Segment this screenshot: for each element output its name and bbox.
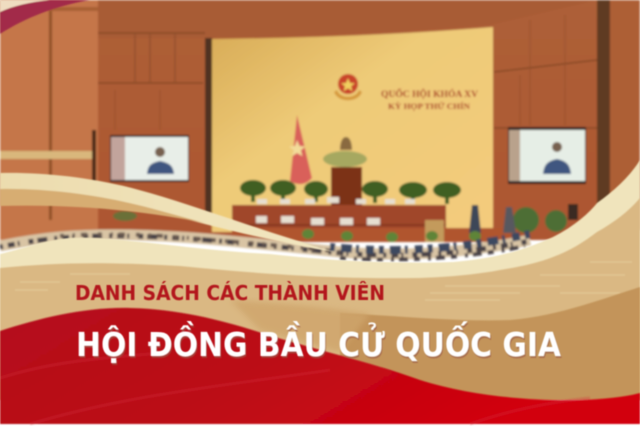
wall text: KỲ HỌP THỨ CHÍN bbox=[388, 101, 471, 111]
upper cream ribbon bbox=[0, 173, 335, 252]
wall text bbox=[381, 87, 478, 111]
photo: national assembly hall bbox=[0, 0, 640, 260]
audience bbox=[0, 234, 530, 260]
red wave bbox=[0, 308, 640, 424]
right dark column and wall bbox=[597, 0, 640, 230]
left orange wall bbox=[0, 0, 98, 240]
subtitle: DANH SÁCH CÁC THÀNH VIÊN bbox=[75, 280, 385, 305]
wall text: QUỐC HỘI KHÓA XV bbox=[381, 87, 478, 100]
beige band under cream edge bbox=[0, 198, 640, 400]
bust and flowers bbox=[323, 137, 367, 167]
flag bbox=[289, 115, 312, 184]
left screen bbox=[110, 135, 189, 182]
national emblem bbox=[334, 74, 362, 100]
title: HỘI ĐỒNG BẦU CỬ QUỐC GIA bbox=[76, 319, 561, 364]
right stage plants and speakers bbox=[113, 204, 578, 242]
golden back wall bbox=[212, 27, 493, 232]
sand wave panel bbox=[0, 160, 640, 400]
top-left corner arc bbox=[0, 0, 90, 34]
lectern bbox=[331, 167, 362, 207]
plants bbox=[240, 180, 461, 204]
title: HỘI ĐỒNG BẦU CỬ QUỐC GIA bbox=[77, 321, 562, 366]
presidium table bbox=[232, 197, 522, 242]
red streaks bbox=[0, 354, 590, 424]
faint map pattern bbox=[15, 262, 632, 300]
lower tan band bbox=[340, 287, 640, 400]
right screen bbox=[508, 127, 586, 184]
central wood panels bbox=[98, 0, 598, 240]
